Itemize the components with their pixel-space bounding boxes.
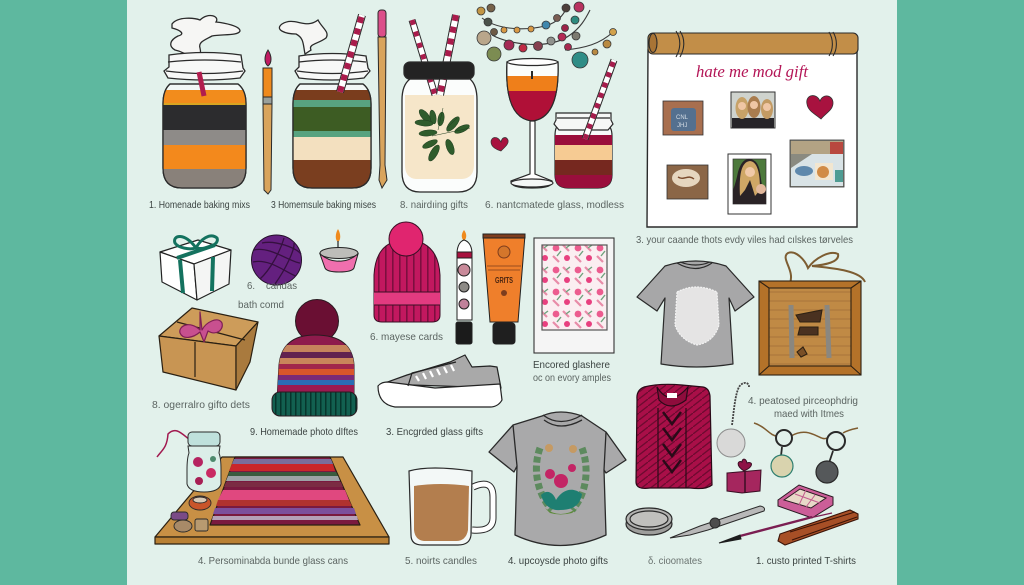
captions: middle labels: 6. mayese cards bbox=[370, 331, 443, 343]
item: small heart left bbox=[491, 137, 508, 151]
item: gray sneaker bbox=[378, 355, 502, 407]
floral print on shirt bbox=[536, 444, 586, 514]
photo: table spread bbox=[790, 140, 844, 187]
captions: bottom row: 4. Persominabda bunde glass cans bbox=[198, 555, 348, 567]
item: wine glass candle bbox=[506, 58, 559, 189]
captions: middle labels: oc on evory amples bbox=[533, 372, 611, 384]
photo: pastry bbox=[667, 165, 708, 199]
photo: slate sign bbox=[663, 101, 703, 135]
captions: candles and bath: candas bbox=[266, 280, 297, 292]
item: layered jar with straw bbox=[550, 60, 616, 190]
captions: middle labels: Encored glashere bbox=[533, 359, 610, 371]
item: decorated lip tube bbox=[456, 230, 472, 344]
item: striped pom-pom beanie bbox=[270, 300, 360, 416]
background: pale mint panel bbox=[127, 0, 897, 585]
item: silver pen bbox=[670, 506, 764, 538]
item: purple yarn ball bbox=[252, 235, 302, 285]
item: wood frame with twine bow bbox=[759, 252, 865, 375]
item: gray t-shirt with lace print bbox=[637, 261, 754, 367]
captions: top row: 8. nairdıing gifts bbox=[400, 199, 468, 211]
captions: middle labels: 3. Encgrded glass gifts bbox=[386, 426, 483, 438]
item: gray t-shirt with floral print bbox=[489, 412, 626, 546]
item: twine with two key charms bbox=[754, 423, 858, 483]
item: tall paint brush bbox=[378, 10, 387, 188]
item: pink chocolate box bbox=[778, 485, 833, 518]
captions: top row: 1. Homenade baking mixs bbox=[149, 199, 250, 211]
captions: top row: 3 Homemsule baking mises bbox=[271, 199, 376, 211]
item: framed floral print bbox=[534, 238, 614, 353]
poster title: hate me mod gift bbox=[696, 62, 809, 81]
item: chain with lace ornament bbox=[717, 383, 749, 457]
item: cinnamon sticks bbox=[778, 510, 858, 545]
captions: bottom row: 1. custo printed T-shirts bbox=[756, 555, 856, 567]
item: kraft box with pink bow bbox=[159, 308, 258, 390]
captions: bottom row: 5. noirts candles bbox=[405, 555, 477, 567]
item: leaf candle jar bbox=[402, 15, 477, 192]
item: fine paint brush bbox=[719, 513, 832, 543]
item: small floral jar with ribbon bbox=[157, 431, 221, 492]
captions: top row: 3. your caande thots evdy viles had cılskes tørveles bbox=[636, 234, 853, 246]
captions: candles and bath: 6. bbox=[247, 280, 255, 292]
item: glass mug with cinnamon drink bbox=[409, 468, 493, 545]
item: orange tube labeled gifts: GRfTS bbox=[495, 276, 513, 285]
item: baking mix jar 1 bbox=[160, 16, 250, 189]
photo: slate sign: CNL bbox=[676, 115, 689, 121]
poster rod bbox=[648, 31, 858, 57]
item: small pink candle bbox=[320, 229, 358, 272]
captions: middle labels: 9. Homemade photo dIftes bbox=[250, 426, 358, 438]
panel: hanging photo poster bbox=[647, 31, 858, 227]
item: wooden board with striped rug bbox=[155, 457, 389, 544]
photo: three friends bbox=[731, 92, 775, 128]
captions: middle labels: maed with Itmes bbox=[774, 408, 844, 420]
captions: bottom row: 4. upcoysde photo gifts bbox=[508, 555, 608, 567]
item: pink knit beanie bbox=[374, 222, 440, 322]
captions: top row bbox=[149, 199, 853, 246]
poster heart bbox=[807, 96, 833, 119]
item: orange tube labeled gifts bbox=[483, 234, 525, 344]
captions: candles and bath: bath comd bbox=[238, 299, 284, 311]
item: small magenta gift bbox=[727, 459, 761, 493]
captions: bottom row: δ. cioomates bbox=[648, 555, 702, 567]
item: baking mix jar 2 bbox=[279, 20, 375, 190]
captions: middle labels: 8. ogerralro gifto dets bbox=[152, 399, 250, 411]
item: trinkets on board bbox=[171, 496, 211, 532]
item: bead garland bbox=[477, 2, 616, 68]
photo: slate sign: JHJ bbox=[677, 123, 687, 129]
item: striped straw on jar 2 bbox=[340, 15, 362, 92]
item: round lens case bbox=[626, 508, 672, 535]
item: paint brush with flame bbox=[263, 50, 272, 194]
item: red cable-knit sweater bbox=[636, 384, 712, 489]
captions: bottom row bbox=[198, 555, 856, 567]
captions: top row: 6. nantcmatede glass, modless bbox=[485, 199, 624, 211]
captions: middle labels: 4. peatosed pirceophdrig bbox=[748, 395, 858, 407]
captions: middle labels bbox=[152, 331, 858, 438]
photo: framed portrait bbox=[728, 154, 771, 214]
item: white gift box with green ribbon bbox=[160, 236, 231, 300]
captions: candles and bath bbox=[238, 280, 297, 311]
